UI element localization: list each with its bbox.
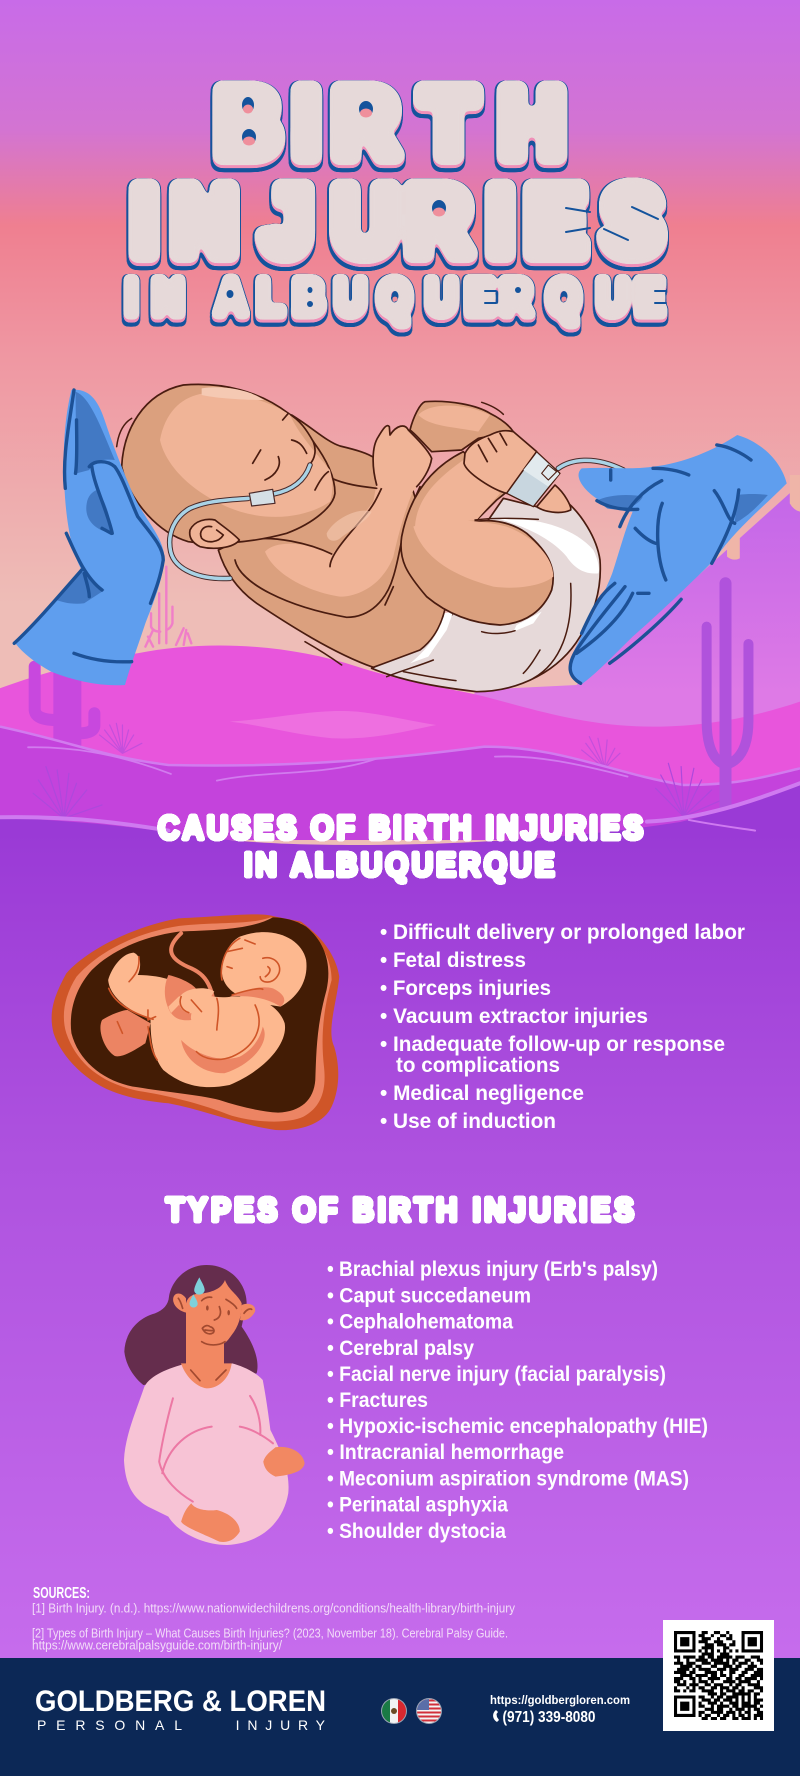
- firm tagline: INJURY: [224, 1717, 326, 1733]
- upper fist: [410, 401, 513, 452]
- hill: magenta: [0, 646, 800, 793]
- cause item 7: • Use of induction: [380, 1110, 556, 1133]
- glove creases: [570, 445, 751, 683]
- sensor cable behind baby: [558, 460, 623, 470]
- source 1: [1] Birth Injury. (n.d.). https://www.nationwidechildrens.org/conditions/health-library/birth-injury: [32, 1602, 516, 1616]
- icon: Mexico flag: [381, 1698, 407, 1724]
- fetus head: [222, 932, 307, 1007]
- title: [125, 71, 666, 325]
- sweat drops: [190, 1277, 205, 1307]
- face light area: [160, 393, 332, 517]
- right blue glove: [569, 435, 787, 685]
- letter slits: [485, 207, 666, 303]
- glove shading: [597, 494, 768, 523]
- ears: [173, 1294, 255, 1320]
- grass tufts on foreground: [33, 763, 722, 818]
- firm name: GOLDBERG & LOREN: [35, 1685, 326, 1718]
- tube connector: [249, 489, 275, 506]
- womb middle layer: [64, 917, 332, 1122]
- cause item 3: • Forceps injuries: [380, 977, 551, 1000]
- diaper: [372, 498, 600, 692]
- title line 1: BIRTH: [216, 71, 564, 176]
- upper hand: [263, 1447, 305, 1477]
- firm tagline: PERSONAL: [37, 1717, 182, 1733]
- fetus line details: [109, 938, 280, 1060]
- type item 6: • Fractures: [327, 1389, 428, 1412]
- dress: [124, 1363, 289, 1545]
- torso: [218, 415, 447, 667]
- source 2: [2] Types of Birth Injury – What Causes Birth Injuries? (2023, November 18). Cerebral Palsy Guide.: [32, 1627, 508, 1641]
- fetus shaded belly: [165, 975, 265, 1073]
- desert landscape: [0, 475, 800, 840]
- type item 3: • Cephalohematoma: [327, 1310, 513, 1334]
- QR code card: [663, 1620, 774, 1731]
- logo: [35, 1685, 326, 1733]
- cause item 5 continuation: to complications: [396, 1054, 560, 1077]
- left dark cactus: [35, 667, 94, 745]
- womb outer wall: [52, 914, 339, 1130]
- near hand: [373, 426, 432, 492]
- letter counters: [226, 97, 568, 307]
- pale dune ridge lines: [28, 747, 628, 781]
- hill: deep magenta foreground: [0, 727, 800, 840]
- pale highlight on hill: [230, 711, 436, 739]
- type item 10: • Perinatal asphyxia: [327, 1494, 508, 1516]
- arm highlights: [327, 511, 372, 541]
- heading: causes: [158, 810, 643, 883]
- body and arms: [124, 1363, 305, 1545]
- diaper highlights: [410, 519, 599, 663]
- facial features: [253, 413, 328, 490]
- head: [122, 384, 335, 543]
- title line 2: INJURIES: [132, 169, 662, 274]
- hill: right light purple: [474, 484, 800, 733]
- illustration: baby in diaper with tubes: [117, 384, 623, 692]
- contact details: [490, 1693, 630, 1726]
- type item 1: • Brachial plexus injury (Erb's palsy): [327, 1258, 658, 1281]
- list: causes: [380, 921, 745, 1133]
- type item 2: • Caput succedaneum: [327, 1284, 531, 1308]
- thigh: [401, 452, 553, 625]
- title line 3: IN ALBUQUERQUE: [125, 269, 664, 325]
- illustration: pregnant woman: [124, 1265, 305, 1545]
- sources: [32, 1585, 516, 1652]
- foot with toes: [464, 431, 537, 493]
- cause item 4: • Vacuum extractor injuries: [380, 1005, 648, 1028]
- footer band: [0, 1658, 800, 1776]
- heading: types: TYPES OF BIRTH INJURIES: [166, 1192, 634, 1228]
- fetus shoulder shade: [230, 987, 284, 1007]
- type item 9: • Meconium aspiration syndrome (MAS): [327, 1468, 689, 1490]
- type item 5: • Facial nerve injury (facial paralysis): [327, 1363, 666, 1386]
- phone number: (971) 339-8080: [502, 1709, 596, 1726]
- fetus body: [108, 953, 285, 1087]
- ankle sensor: [507, 452, 560, 507]
- cause item 2: • Fetal distress: [380, 949, 526, 972]
- thigh light area: [413, 460, 553, 588]
- website: https://goldbergloren.com: [490, 1693, 630, 1707]
- dress fold lines: [159, 1396, 273, 1502]
- purple lower panel: [0, 783, 800, 1660]
- cause item 6: • Medical negligence: [380, 1082, 584, 1105]
- head highlight: [202, 387, 264, 400]
- sources heading: SOURCES:: [33, 1585, 90, 1602]
- eyes: [206, 1305, 230, 1315]
- lower hand: [181, 1503, 240, 1542]
- far leg: [100, 1010, 151, 1056]
- type item 4: • Cerebral palsy: [327, 1337, 474, 1360]
- QR code modules: [674, 1633, 763, 1718]
- illustration: fetus in womb: [52, 914, 339, 1130]
- heading line 1: CAUSES OF BIRTH INJURIES: [158, 810, 643, 846]
- icon: phone: [493, 1710, 499, 1722]
- small pink cactus: [145, 567, 191, 647]
- left blue glove: [14, 390, 164, 685]
- heading line 2: IN ALBUQUERQUE: [244, 847, 555, 883]
- womb cavity: [71, 917, 328, 1113]
- type item 8: • Intracranial hemorrhage: [327, 1441, 564, 1464]
- face and neck: [181, 1280, 242, 1388]
- cause item 1: • Difficult delivery or prolonged labor: [380, 921, 745, 944]
- head and neck: [173, 1277, 255, 1388]
- source 2 url: https://www.cerebralpalsyguide.com/birth-injury/: [32, 1638, 282, 1652]
- list: types: [327, 1258, 708, 1543]
- diaper folds and motion lines: [117, 402, 571, 681]
- type item 7: • Hypoxic-ischemic encephalopathy (HIE): [327, 1415, 708, 1438]
- fetus hand: [179, 988, 214, 1013]
- facial features: [178, 1297, 252, 1381]
- nasal tube: [170, 465, 310, 579]
- icon: USA flag: [416, 1698, 442, 1724]
- hair: [124, 1265, 258, 1385]
- right saguaro cactus: [707, 583, 748, 815]
- tufts of grass on hill: [99, 723, 620, 768]
- foreground crest line: [0, 727, 800, 785]
- background sky gradient: [0, 0, 800, 1000]
- calf: [537, 485, 571, 512]
- type item 11: • Shoulder dystocia: [327, 1520, 506, 1543]
- glove shading: [56, 392, 115, 604]
- peach drips on hill: [727, 475, 800, 560]
- arm outlines: [235, 478, 420, 617]
- umbilical cord: [171, 933, 217, 1030]
- dune crest stroke: [0, 783, 800, 831]
- glove creases: [14, 390, 163, 662]
- ear: [190, 519, 239, 548]
- arm light area: [265, 483, 417, 597]
- cause item 5: • Inadequate follow-up or response: [380, 1033, 725, 1056]
